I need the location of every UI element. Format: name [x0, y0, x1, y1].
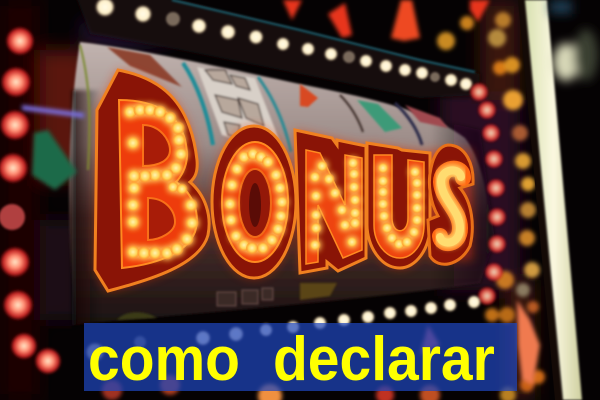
letter U [367, 143, 430, 268]
N bulbs [310, 158, 360, 250]
title banner [84, 323, 517, 394]
title text: declarar: declarar [273, 324, 495, 394]
O bulbs [224, 148, 288, 254]
B bulbs [124, 104, 198, 260]
reel stripes and symbols [80, 45, 448, 320]
BONUS glow [95, 70, 472, 291]
reel edge shading [72, 90, 495, 325]
left red lights [0, 26, 62, 375]
rail teal edge [172, 0, 475, 72]
lights behind banner [102, 325, 440, 400]
top marquee bulbs [95, 0, 473, 91]
letter N [295, 130, 366, 273]
left reel symbols [22, 105, 84, 190]
right cabinet glow [440, 0, 535, 400]
letter O [212, 126, 296, 278]
U bulbs [378, 162, 422, 250]
title text: como: como [88, 324, 240, 394]
letter B [95, 70, 209, 291]
left cabinet haze [0, 0, 180, 400]
bright vertical light bar [518, 0, 582, 400]
slot reel drum [69, 42, 488, 324]
right pink lights [469, 82, 507, 306]
flame light [517, 300, 540, 385]
S bulbs [440, 170, 461, 243]
bottom marquee bulbs [85, 295, 481, 362]
letter S [428, 145, 473, 264]
orange bokeh lights [437, 12, 545, 400]
marquee rail [70, 0, 480, 98]
right side blurred lights [550, 0, 598, 81]
top red signs [283, 0, 490, 41]
